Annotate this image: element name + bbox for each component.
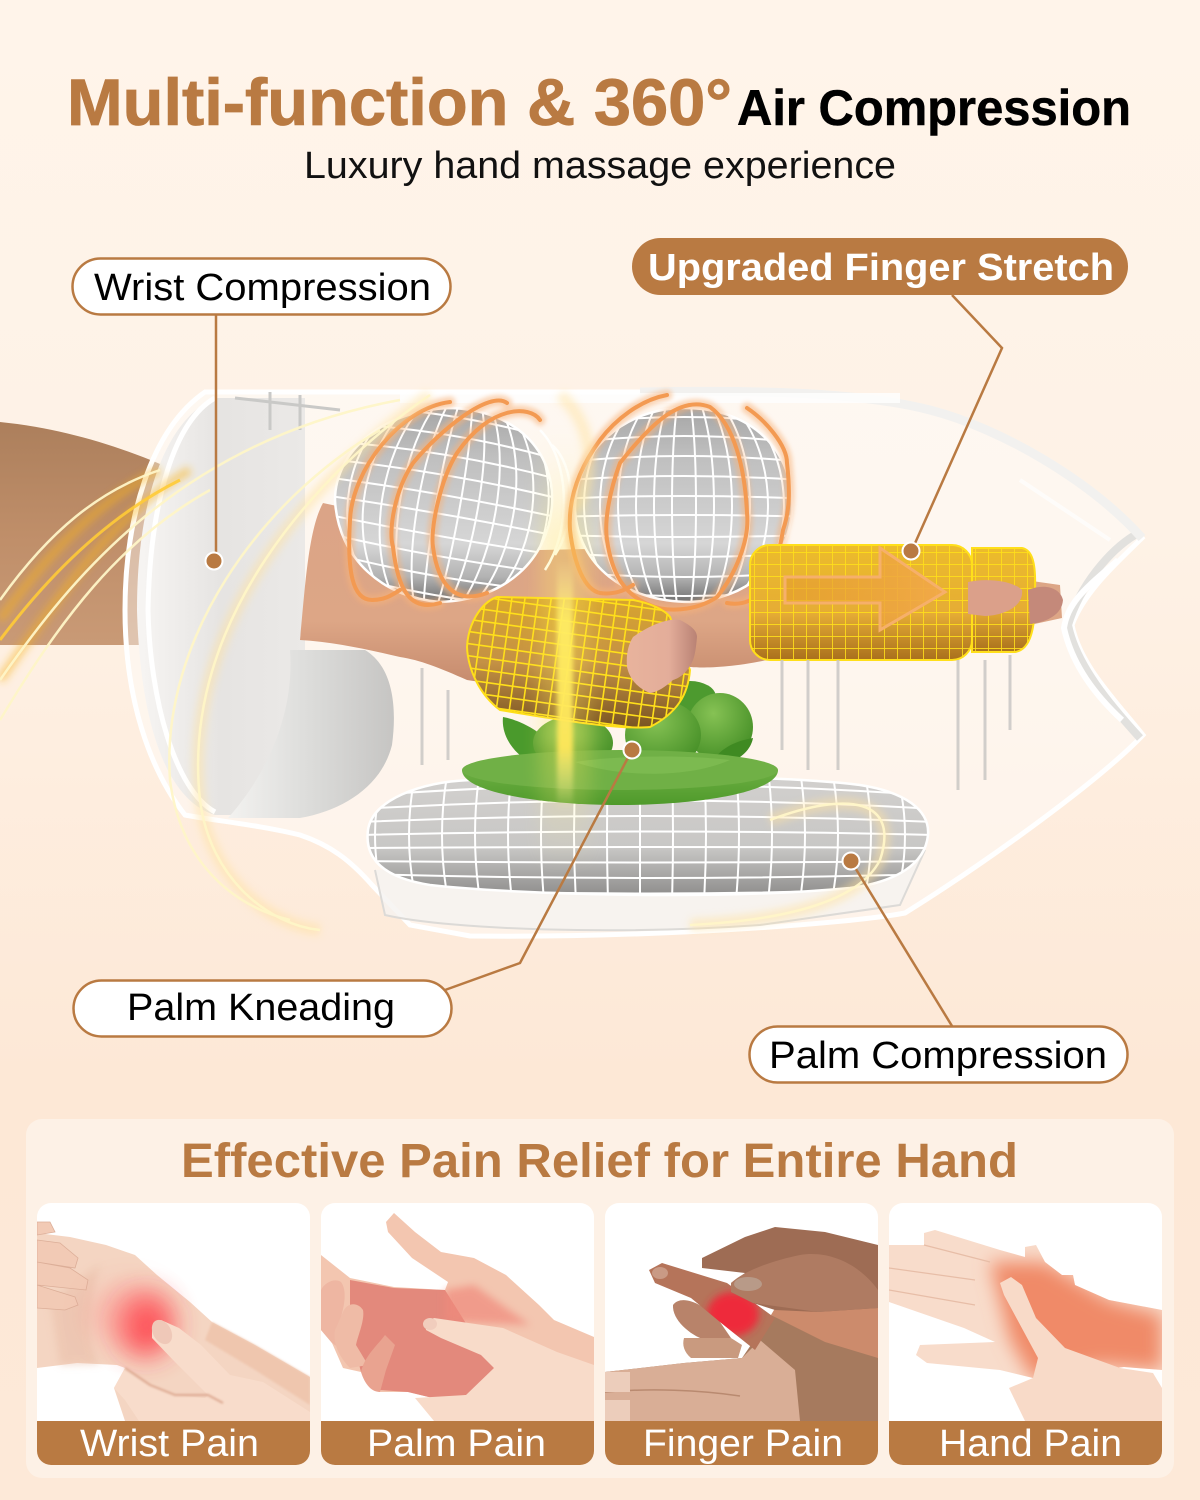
label: upgraded finger stretch [632, 238, 1128, 295]
card: hand pain: Hand Pain [939, 1423, 1122, 1465]
orange air loops left [349, 400, 540, 605]
transparent shell [125, 391, 1143, 936]
label: palm compression: Palm Compression [769, 1035, 1107, 1077]
label: wrist compression: Wrist Compression [94, 267, 431, 309]
pressing hand [205, 1322, 310, 1405]
golden energy swirls [0, 395, 884, 930]
card: wrist pain [37, 1203, 310, 1465]
card: wrist pain: Wrist Pain [80, 1423, 259, 1465]
upper right air bag [562, 387, 797, 614]
thumb air bag [466, 596, 697, 728]
card: palm pain: Palm Pain [367, 1423, 546, 1465]
leader line: wrist compression [206, 315, 222, 570]
upper left air bag [334, 392, 571, 610]
pinched red finger [649, 1263, 775, 1350]
wrist hand [37, 1233, 310, 1421]
forearm outside device [0, 422, 160, 645]
label: palm kneading: Palm Kneading [127, 987, 395, 1029]
label: upgraded finger stretch: Upgraded Finger Stretch [648, 247, 1114, 289]
card: palm pain [321, 1203, 594, 1465]
palm main hand [321, 1213, 594, 1400]
palm curled fingers [321, 1280, 345, 1350]
upper hand [702, 1227, 878, 1312]
support rods [422, 655, 1010, 790]
panel heading: Effective Pain Relief for Entire Hand [181, 1135, 1018, 1188]
hand upper with fingers [889, 1230, 1162, 1378]
palm pressing hand [415, 1318, 594, 1421]
finger air bag [750, 545, 1063, 660]
label: palm kneading [74, 980, 452, 1036]
stretch arrow [785, 548, 945, 630]
card: finger pain [605, 1203, 878, 1465]
green kneading petals [503, 681, 753, 770]
card: finger pain: Finger Pain [643, 1423, 843, 1465]
palm air bag [366, 778, 930, 896]
product illustration: hand massager [0, 362, 1143, 936]
leader line: palm kneading [445, 742, 640, 990]
wrist cuff [137, 398, 305, 815]
subtitle: Luxury hand massage experience [304, 145, 896, 187]
panel: pain relief [26, 1119, 1174, 1478]
title [67, 65, 1131, 139]
kneading base [462, 750, 778, 805]
lower hand [605, 1315, 878, 1421]
central light flare [540, 430, 590, 870]
hand and fingers [300, 503, 1062, 700]
curled fingers behind [673, 1300, 731, 1340]
leader line: finger stretch [902, 295, 1002, 560]
label: palm compression [750, 1026, 1128, 1082]
label: wrist compression [72, 258, 450, 314]
pressing hand [1000, 1277, 1162, 1421]
forearm behind [771, 1308, 878, 1358]
device base details [375, 850, 925, 930]
leader line: palm compression [842, 852, 952, 1026]
orange air loops right [570, 395, 789, 610]
title: Multi-function & 360° [67, 65, 732, 139]
card: hand pain [889, 1203, 1162, 1465]
title: Air Compression [737, 80, 1131, 136]
